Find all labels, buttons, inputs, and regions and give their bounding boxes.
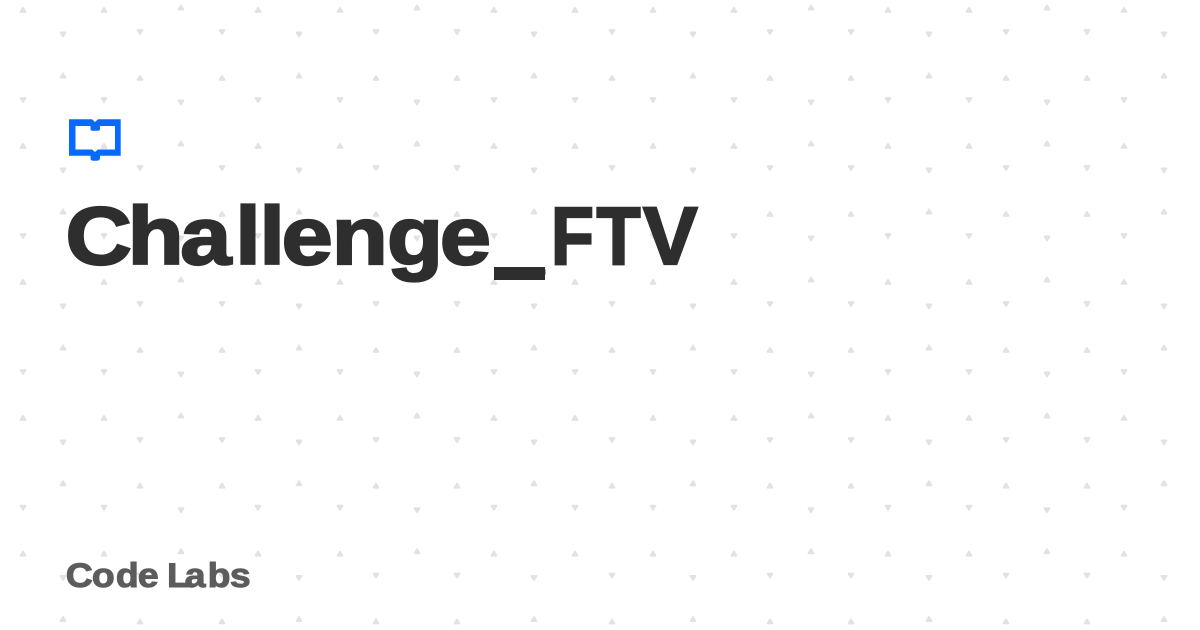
title: T [596,191,641,282]
title: V [643,191,698,282]
icon: open book [69,119,121,161]
title: F [551,191,594,282]
brand name: Code Labs [66,557,251,595]
title: Challenge_ [66,191,545,282]
